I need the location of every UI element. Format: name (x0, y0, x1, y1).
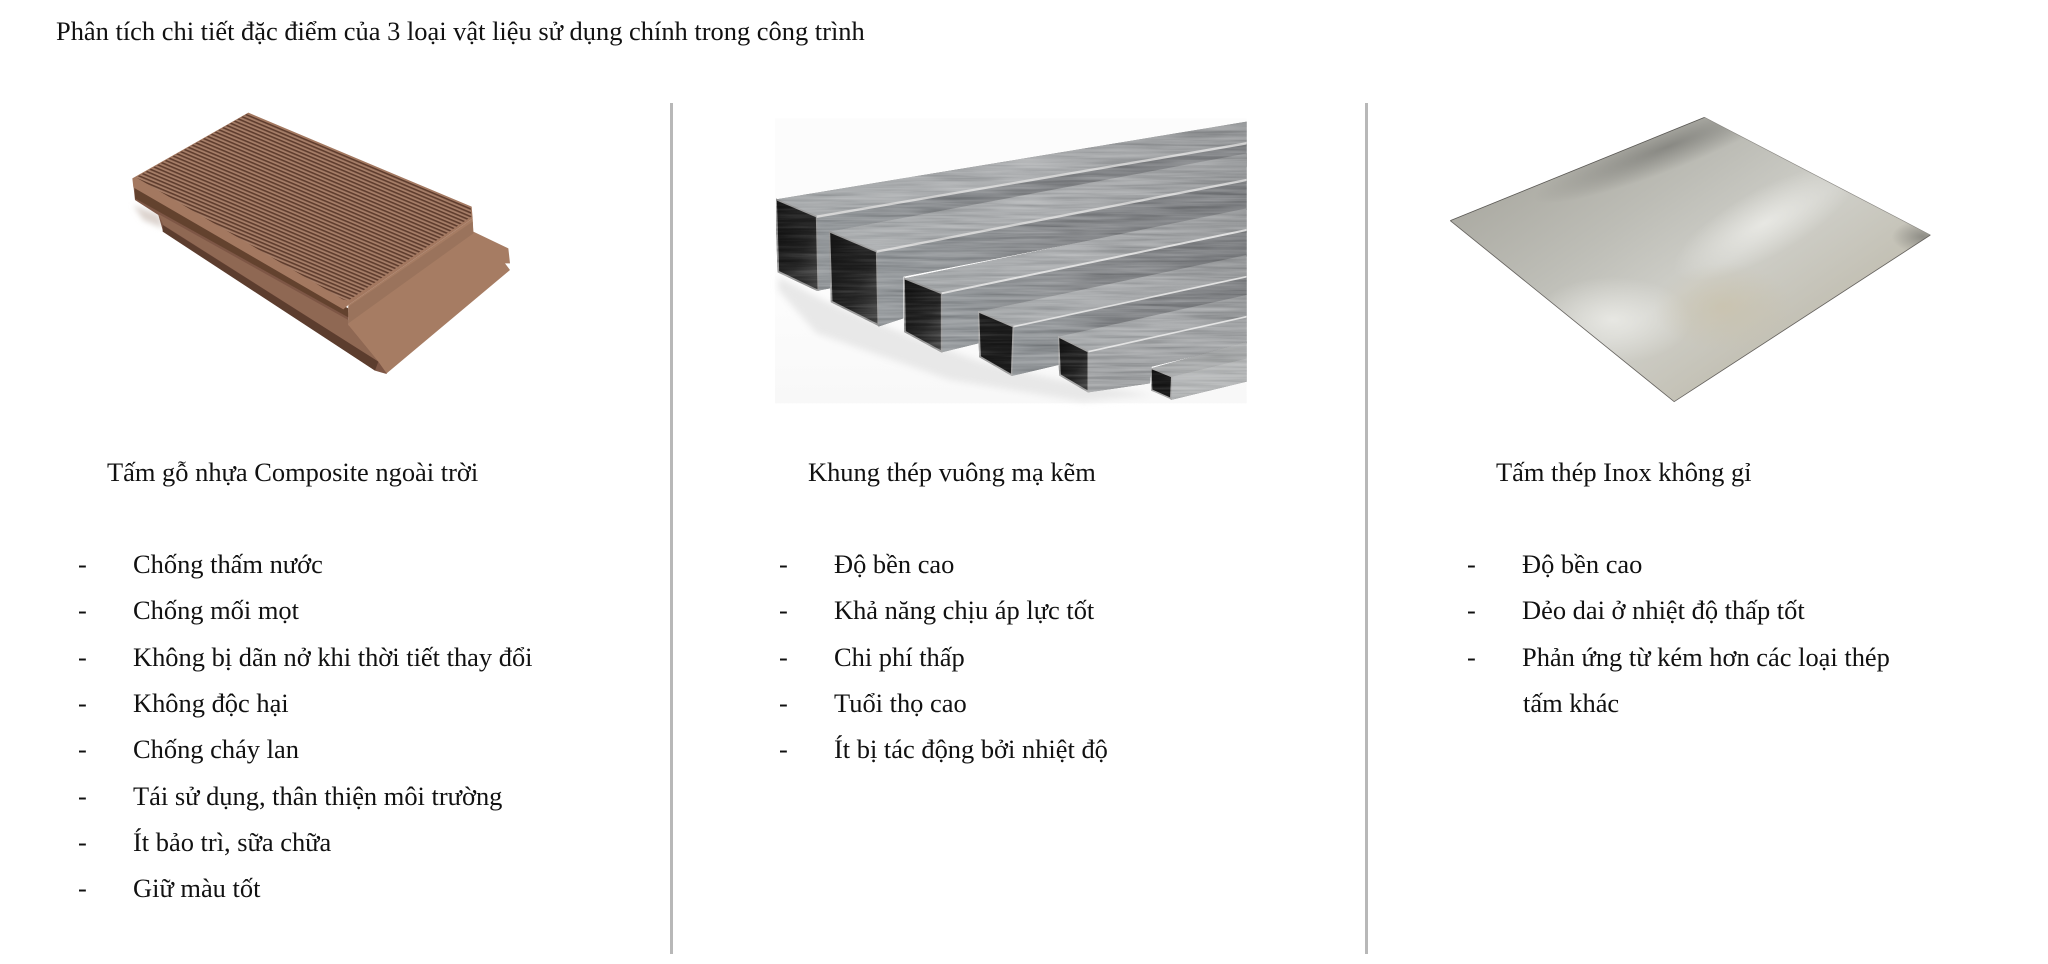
image: composite wood board (132, 112, 510, 374)
list: inox properties (1467, 549, 1890, 718)
panel: composite column text (78, 457, 533, 903)
image: stainless steel sheet (1450, 117, 1930, 402)
tube 4 (978, 255, 1247, 376)
tube 2 (829, 153, 1247, 327)
list: inox properties: Phản ứng từ kém hơn các loại thép (1522, 642, 1890, 672)
list: steel frame properties: - (779, 688, 788, 718)
list: composite properties: Ít bảo trì, sữa chữa (133, 827, 331, 857)
list: composite properties (78, 549, 533, 903)
heading: inox: Tấm thép Inox không gỉ (1496, 457, 1752, 487)
tube 1 (776, 122, 1247, 291)
list: composite properties: Chống mối mọt (133, 595, 299, 625)
list: composite properties: - (78, 595, 87, 625)
title: Phân tích chi tiết đặc điểm của 3 loại vật liệu sử dụng chính trong công trình (56, 16, 865, 46)
list: inox properties: - (1467, 642, 1476, 672)
list: steel frame properties: - (779, 642, 788, 672)
list: composite properties: Chống thấm nước (133, 549, 323, 579)
panel: steel frame column text (779, 457, 1108, 764)
divider (670, 103, 673, 954)
list: inox properties: - (1467, 595, 1476, 625)
list: composite properties: - (78, 827, 87, 857)
list: steel frame properties (779, 549, 1108, 764)
list: composite properties: - (78, 781, 87, 811)
list: composite properties: - (78, 873, 87, 903)
list: inox properties: Độ bền cao (1522, 549, 1642, 579)
list: steel frame properties: - (779, 595, 788, 625)
tube 5 (1058, 295, 1247, 392)
list: steel frame properties: Tuổi thọ cao (834, 688, 967, 718)
list: composite properties: - (78, 688, 87, 718)
list: steel frame properties: - (779, 734, 788, 764)
list: inox properties: Dẻo dai ở nhiệt độ thấp tốt (1522, 595, 1805, 625)
list: steel frame properties: - (779, 549, 788, 579)
image: galvanized square steel tubes (776, 122, 1247, 404)
list: composite properties: Tái sử dụng, thân thiện môi trường (133, 781, 502, 811)
list: composite properties: - (78, 549, 87, 579)
divider (1365, 103, 1368, 954)
tube 6 (1151, 342, 1247, 400)
list: composite properties: Giữ màu tốt (133, 873, 260, 903)
list: composite properties: - (78, 734, 87, 764)
heading: steel frame: Khung thép vuông mạ kẽm (808, 457, 1096, 487)
list: composite properties: Không bị dãn nở khi thời tiết thay đổi (133, 642, 533, 672)
list: composite properties: - (78, 642, 87, 672)
panel: inox column text (1467, 457, 1890, 718)
list: steel frame properties: Độ bền cao (834, 549, 954, 579)
list: inox properties: tấm khác (1523, 688, 1619, 718)
list: steel frame properties: Khả năng chịu áp lực tốt (834, 595, 1094, 625)
list: steel frame properties: Ít bị tác động bởi nhiệt độ (834, 734, 1108, 764)
list: composite properties: Chống cháy lan (133, 734, 299, 764)
list: composite properties: Không độc hại (133, 688, 289, 718)
tube 3 (904, 208, 1247, 352)
list: steel frame properties: Chi phí thấp (834, 642, 965, 672)
list: inox properties: - (1467, 549, 1476, 579)
heading: composite: Tấm gỗ nhựa Composite ngoài trời (107, 457, 478, 487)
